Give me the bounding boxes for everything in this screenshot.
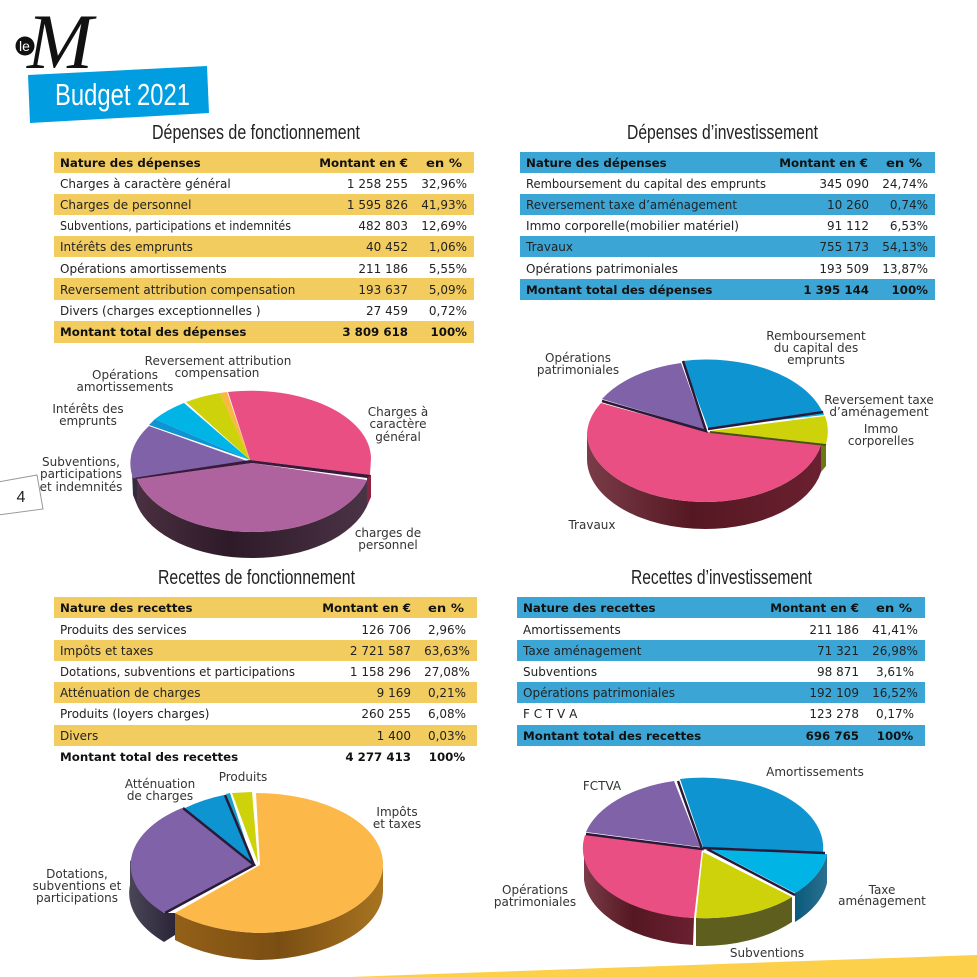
table: recettes de fonctionnement: Produits (loyers charges) xyxy=(60,707,209,721)
table: dépenses de fonctionnement: Montant en € xyxy=(319,156,408,170)
table: recettes de fonctionnement: Nature des recettes xyxy=(60,601,192,615)
table: recettes de fonctionnement: 2,96% xyxy=(428,623,466,637)
table: recettes de fonctionnement: 260 255 xyxy=(361,707,411,721)
pie chart: recettes de fonctionnement xyxy=(129,792,383,960)
page number tab: 4 xyxy=(17,489,26,506)
table: recettes d'investissement: Subventions xyxy=(523,665,597,679)
heading: Dépenses de fonctionnement: Dépenses de fonctionnement xyxy=(152,122,360,144)
table: dépenses de fonctionnement xyxy=(54,152,474,343)
table: recettes d'investissement: 71 321 xyxy=(817,644,859,658)
table: dépenses d'investissement: Remboursement du capital des emprunts xyxy=(526,177,766,191)
table: recettes de fonctionnement: en % xyxy=(428,601,464,615)
table: dépenses de fonctionnement: Montant total des dépenses xyxy=(60,325,246,339)
table: recettes de fonctionnement: 63,63% xyxy=(424,644,470,658)
table: dépenses de fonctionnement: 12,69% xyxy=(421,219,467,233)
pie labels: dépenses de fonctionnement: Subventions, xyxy=(42,455,120,469)
logo: le M: M xyxy=(26,0,97,85)
pie labels: dépenses de fonctionnement: emprunts xyxy=(59,414,117,428)
table: recettes de fonctionnement: 27,08% xyxy=(424,665,470,679)
table: recettes de fonctionnement: 6,08% xyxy=(428,707,466,721)
table: recettes d'investissement: Montant en € xyxy=(770,601,859,615)
table: dépenses de fonctionnement: 193 637 xyxy=(358,283,408,297)
table: dépenses d'investissement: Immo corporelle(mobilier matériel) xyxy=(526,219,739,233)
pie labels: recettes d'investissement: Subventions xyxy=(730,946,804,960)
table: dépenses d'investissement: 24,74% xyxy=(882,177,928,191)
table: recettes d'investissement: 41,41% xyxy=(872,623,918,637)
table: recettes de fonctionnement: Produits des services xyxy=(60,623,187,637)
pie labels: dépenses de fonctionnement xyxy=(40,354,428,552)
heading: Recettes d'investissement: Recettes d’investissement xyxy=(631,567,812,589)
pie labels: dépenses d'investissement: Reversement taxe xyxy=(824,393,934,407)
logo: le M: le xyxy=(19,38,30,54)
table: recettes d'investissement: 211 186 xyxy=(809,623,859,637)
pie labels: dépenses de fonctionnement: Intérêts des xyxy=(52,402,124,416)
table: recettes d'investissement: 98 871 xyxy=(817,665,859,679)
pie labels: dépenses de fonctionnement: amortissements xyxy=(77,380,173,394)
pie chart: recettes d'investissement xyxy=(583,778,827,946)
table: recettes de fonctionnement: 0,21% xyxy=(428,686,466,700)
heading: Dépenses d'investissement: Dépenses d’investissement xyxy=(627,122,818,144)
table: dépenses de fonctionnement: 482 803 xyxy=(358,219,408,233)
table: dépenses d'investissement: 1 395 144 xyxy=(803,283,869,297)
table: dépenses de fonctionnement: 100% xyxy=(431,325,467,339)
table: dépenses d'investissement: Montant en € xyxy=(779,156,868,170)
table: dépenses de fonctionnement: Intérêts des emprunts xyxy=(60,240,193,254)
table: recettes de fonctionnement: 1 158 296 xyxy=(350,665,411,679)
pie chart: dépenses d'investissement xyxy=(587,360,828,529)
table: dépenses d'investissement: Reversement taxe d’aménagement xyxy=(526,198,737,212)
table: dépenses d'investissement: Opérations patrimoniales xyxy=(526,262,678,276)
pie labels: recettes de fonctionnement: Produits xyxy=(219,770,267,784)
banner: Budget 2021: Budget 2021 xyxy=(55,77,190,112)
table: recettes d'investissement: en % xyxy=(876,601,912,615)
table: dépenses de fonctionnement: 40 452 xyxy=(366,240,408,254)
pie labels: recettes d'investissement: Taxe xyxy=(868,883,895,897)
table: dépenses de fonctionnement: 1 595 826 xyxy=(347,198,408,212)
table: recettes de fonctionnement: 100% xyxy=(429,750,465,764)
pie labels: dépenses de fonctionnement: caractère xyxy=(370,417,426,431)
pie labels: dépenses d'investissement: corporelles xyxy=(848,434,914,448)
table: dépenses de fonctionnement: Opérations amortissements xyxy=(60,262,227,276)
table: dépenses d'investissement: 54,13% xyxy=(882,240,928,254)
table: dépenses d'investissement: 345 090 xyxy=(819,177,869,191)
table: recettes d'investissement: Taxe aménagement xyxy=(522,644,642,658)
table: recettes d'investissement: 696 765 xyxy=(806,729,859,743)
pie labels: dépenses de fonctionnement: charges de xyxy=(355,526,421,540)
table: recettes de fonctionnement: Divers xyxy=(60,729,98,743)
table: recettes de fonctionnement: Montant total des recettes xyxy=(60,750,238,764)
pie labels: recettes d'investissement: Opérations xyxy=(502,883,568,897)
pie labels: recettes de fonctionnement: de charges xyxy=(127,789,193,803)
table: recettes d'investissement: Nature des recettes xyxy=(523,601,656,615)
table: dépenses d'investissement: 13,87% xyxy=(882,262,928,276)
banner: Budget 2021 xyxy=(28,66,209,123)
table: recettes de fonctionnement xyxy=(54,597,477,764)
pie labels: dépenses d'investissement xyxy=(537,329,934,532)
table: dépenses de fonctionnement: 27 459 xyxy=(366,304,408,318)
pie labels: dépenses de fonctionnement: général xyxy=(375,430,421,444)
table: dépenses d'investissement: 10 260 xyxy=(827,198,869,212)
table: recettes d'investissement: 192 109 xyxy=(809,686,859,700)
pie labels: recettes d'investissement: patrimoniales xyxy=(494,895,576,909)
table: recettes de fonctionnement: Atténuation de charges xyxy=(60,686,201,700)
table: dépenses de fonctionnement: 211 186 xyxy=(358,262,408,276)
table: recettes de fonctionnement: 0,03% xyxy=(428,729,466,743)
table: recettes d'investissement: Montant total des recettes xyxy=(523,729,701,743)
table: recettes d'investissement: F C T V A xyxy=(523,707,578,721)
pie labels: recettes d'investissement: Amortissements xyxy=(766,765,864,779)
pie labels: recettes d'investissement xyxy=(494,765,926,960)
pie labels: recettes de fonctionnement xyxy=(33,770,421,905)
pie chart: dépenses de fonctionnement xyxy=(130,391,371,558)
table: dépenses d'investissement: 755 173 xyxy=(819,240,869,254)
page number tab xyxy=(0,475,43,515)
table: dépenses de fonctionnement: Nature des dépenses xyxy=(60,156,201,170)
table: recettes de fonctionnement: 2 721 587 xyxy=(350,644,411,658)
table: recettes de fonctionnement: Dotations, subventions et participations xyxy=(60,665,295,679)
table: recettes de fonctionnement: 4 277 413 xyxy=(345,750,411,764)
table: recettes d'investissement: Amortissements xyxy=(523,623,621,637)
heading: Recettes de fonctionnement: Recettes de fonctionnement xyxy=(158,567,355,589)
pie labels: recettes de fonctionnement: subventions et xyxy=(33,879,122,893)
table: dépenses de fonctionnement: Charges à caractère général xyxy=(60,177,231,191)
pie labels: recettes d'investissement: aménagement xyxy=(838,894,926,908)
pie labels: dépenses d'investissement: patrimoniales xyxy=(537,363,619,377)
pie labels: dépenses d'investissement: Immo xyxy=(864,422,898,436)
pie labels: dépenses de fonctionnement: Opérations xyxy=(92,368,158,382)
pie labels: dépenses de fonctionnement: participations xyxy=(40,467,122,481)
pie labels: dépenses d'investissement: du capital des xyxy=(774,341,858,355)
pie labels: dépenses d'investissement: Remboursement xyxy=(766,329,866,343)
pie labels: dépenses de fonctionnement: Charges à xyxy=(368,405,428,419)
table: dépenses de fonctionnement: 1,06% xyxy=(429,240,467,254)
table: dépenses de fonctionnement: Reversement attribution compensation xyxy=(60,283,295,297)
table: recettes d'investissement: 100% xyxy=(877,729,913,743)
pie labels: recettes de fonctionnement: Atténuation xyxy=(125,777,195,791)
table: dépenses d'investissement: 6,53% xyxy=(890,219,928,233)
table: dépenses d'investissement: 193 509 xyxy=(819,262,869,276)
table: dépenses de fonctionnement: Charges de personnel xyxy=(60,198,191,212)
table: dépenses de fonctionnement: 41,93% xyxy=(421,198,467,212)
table: recettes de fonctionnement: Montant en € xyxy=(322,601,411,615)
pie labels: dépenses d'investissement: emprunts xyxy=(787,353,845,367)
table: dépenses de fonctionnement: 0,72% xyxy=(429,304,467,318)
pie labels: dépenses d'investissement: Travaux xyxy=(567,518,616,532)
table: dépenses d'investissement: Montant total des dépenses xyxy=(526,283,712,297)
table: dépenses de fonctionnement: 5,09% xyxy=(429,283,467,297)
table: dépenses d'investissement: 91 112 xyxy=(827,219,869,233)
pie labels: dépenses d'investissement: d’aménagement xyxy=(829,405,929,419)
table: recettes de fonctionnement: 126 706 xyxy=(361,623,411,637)
pie labels: recettes de fonctionnement: participations xyxy=(36,891,118,905)
pie labels: dépenses de fonctionnement: personnel xyxy=(358,538,418,552)
pie labels: recettes d'investissement: FCTVA xyxy=(583,779,622,793)
table: dépenses d'investissement: Travaux xyxy=(525,240,573,254)
table: recettes d'investissement xyxy=(517,597,925,746)
pie labels: dépenses de fonctionnement: et indemnités xyxy=(40,480,122,494)
pie labels: recettes de fonctionnement: Impôts xyxy=(376,805,418,819)
table: dépenses de fonctionnement: 3 809 618 xyxy=(342,325,408,339)
pie labels: recettes de fonctionnement: Dotations, xyxy=(46,867,108,881)
table: recettes de fonctionnement: 1 400 xyxy=(377,729,411,743)
table: dépenses de fonctionnement: Divers (charges exceptionnelles ) xyxy=(60,304,261,318)
table: dépenses d'investissement: Nature des dépenses xyxy=(526,156,667,170)
footer yellow band xyxy=(350,955,977,977)
table: recettes d'investissement: 16,52% xyxy=(872,686,918,700)
pie labels: dépenses de fonctionnement: Reversement attribution xyxy=(145,354,291,368)
table: recettes d'investissement: 123 278 xyxy=(809,707,859,721)
table: dépenses de fonctionnement: 1 258 255 xyxy=(347,177,408,191)
table: recettes de fonctionnement: Impôts et taxes xyxy=(60,644,153,658)
table: recettes de fonctionnement: 9 169 xyxy=(377,686,411,700)
table: dépenses d'investissement: en % xyxy=(886,156,922,170)
table: dépenses d'investissement: 0,74% xyxy=(890,198,928,212)
pie labels: dépenses d'investissement: Opérations xyxy=(545,351,611,365)
pie labels: recettes de fonctionnement: et taxes xyxy=(373,817,421,831)
table: recettes d'investissement: 3,61% xyxy=(876,665,914,679)
table: dépenses d'investissement: 100% xyxy=(892,283,928,297)
table: dépenses de fonctionnement: en % xyxy=(426,156,462,170)
table: dépenses de fonctionnement: Subventions, participations et indemnités xyxy=(60,219,291,233)
table: dépenses de fonctionnement: 32,96% xyxy=(421,177,467,191)
table: recettes d'investissement: 26,98% xyxy=(872,644,918,658)
table: dépenses d'investissement xyxy=(520,152,935,300)
table: recettes d'investissement: 0,17% xyxy=(876,707,914,721)
pie labels: dépenses de fonctionnement: compensation xyxy=(175,366,259,380)
table: recettes d'investissement: Opérations patrimoniales xyxy=(523,686,675,700)
table: dépenses de fonctionnement: 5,55% xyxy=(429,262,467,276)
